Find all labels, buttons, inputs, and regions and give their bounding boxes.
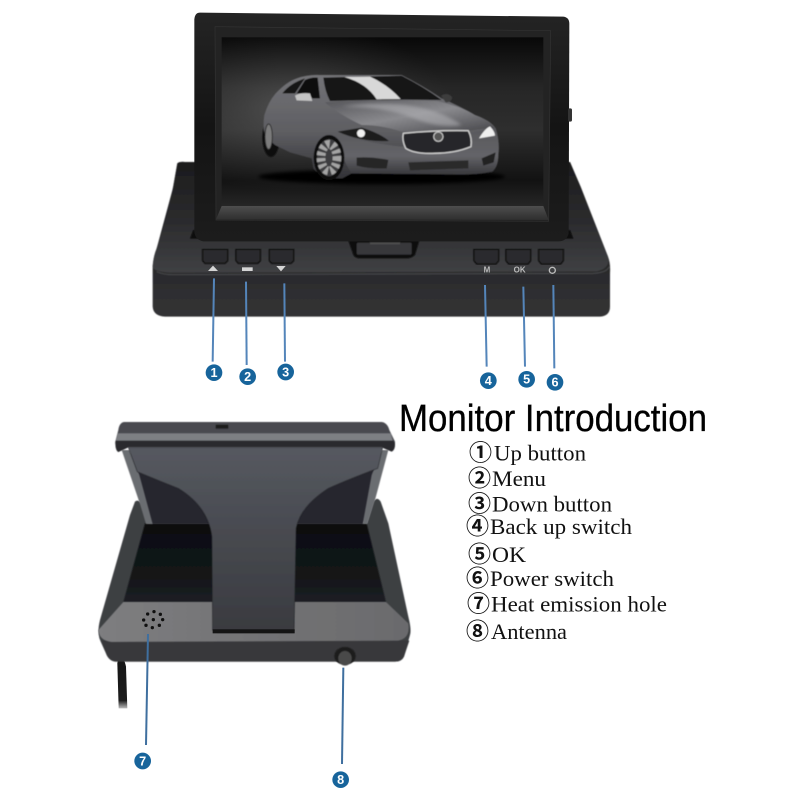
badge 4: 4 (485, 374, 492, 388)
button glyphs (208, 266, 555, 275)
legend item 1: Up button (494, 440, 586, 466)
lower left vent (357, 157, 388, 168)
badge 8 (332, 771, 349, 788)
rim spokes (321, 144, 337, 171)
lower right vent (482, 152, 496, 166)
badge 6: 6 (551, 376, 559, 390)
far side mirror (441, 94, 452, 102)
line 1 (213, 278, 214, 362)
badge 3: 3 (282, 365, 289, 379)
near side mirror (295, 93, 312, 101)
monitor display housing (190, 13, 573, 241)
badge 1 (206, 364, 222, 381)
line 3 (281, 283, 288, 362)
callout lines 1 to 6 (213, 278, 554, 368)
left headlight glow (357, 129, 365, 137)
screen (222, 37, 543, 206)
legend item 8: ⑧ (466, 612, 489, 646)
button power (539, 249, 563, 264)
front wheel (314, 135, 344, 180)
grille (403, 131, 471, 153)
base side rim (98, 499, 411, 662)
glyph OK label: OK (514, 266, 526, 275)
right headlight (479, 126, 495, 138)
lower screen frame (216, 206, 549, 220)
monitor top bar (115, 422, 395, 452)
hood (325, 100, 495, 132)
screen glow (222, 37, 543, 206)
antenna connector (334, 647, 356, 666)
base body (98, 499, 411, 662)
badge 8: 8 (337, 773, 344, 787)
legend list (466, 434, 667, 646)
callout line 7 (146, 634, 148, 745)
button M (474, 249, 499, 264)
legend item 8: Antenna (491, 619, 567, 644)
badge 7 (134, 753, 151, 769)
badge 6 (547, 374, 563, 391)
legend item 3: ③ (468, 484, 491, 518)
stand slot (213, 629, 295, 633)
rear view of monitor (98, 422, 411, 788)
legend item 7: ⑦ (467, 584, 490, 618)
left headlight (338, 128, 389, 141)
rear side window (282, 78, 305, 93)
line 2 (243, 282, 250, 365)
windshield (323, 76, 442, 101)
badge 4 (480, 372, 497, 389)
legend item 3: Down button (492, 492, 612, 516)
side knob (568, 108, 572, 122)
front view of monitor (153, 13, 610, 391)
heat emission holes (142, 610, 164, 629)
monitor side strip left (122, 450, 153, 524)
lower centre intake (408, 160, 468, 170)
badge 5: 5 (523, 373, 530, 387)
inner frame (215, 27, 551, 221)
hood highlight (342, 104, 462, 126)
rear wheel (262, 118, 280, 157)
badge 5 (518, 371, 535, 388)
front fascia (337, 128, 499, 174)
title: Monitor Introduction (399, 398, 707, 440)
windshield reflection (344, 77, 401, 99)
storage tray (123, 523, 386, 602)
hinge shadow (190, 230, 573, 239)
hinge latch (348, 241, 419, 258)
car on screen (258, 75, 505, 184)
legend item 4: ④ (466, 507, 489, 541)
legend item 1: ① (469, 434, 492, 468)
glyph menu bar (242, 267, 253, 271)
button up (203, 249, 228, 263)
legend item 6: ⑥ (466, 559, 489, 593)
badge 3 (277, 364, 294, 380)
badge (434, 132, 443, 141)
glyph down arrow (276, 266, 286, 271)
legend item 2: ② (468, 459, 491, 493)
legend item 7: Heat emission hole (491, 592, 667, 616)
glyph up arrow (208, 266, 218, 271)
button down (269, 249, 294, 263)
line 4 (485, 285, 487, 367)
rear rim (265, 124, 272, 149)
base front edge (102, 641, 409, 662)
glyph M label: M (484, 266, 491, 275)
callout badges 1 to 6 (206, 364, 563, 391)
base top face (98, 602, 409, 642)
car shadow (258, 169, 505, 184)
button menu (236, 249, 260, 263)
badge 1: 1 (210, 366, 218, 380)
legend item 5: OK (492, 542, 527, 567)
legend item 2: Menu (492, 466, 546, 491)
button OK (506, 249, 531, 264)
base unit (153, 162, 610, 317)
legend item 6: Power switch (490, 566, 614, 591)
monitor back panel (130, 453, 382, 524)
line 5 (523, 287, 525, 367)
car body (264, 75, 499, 178)
monitor side strip right (363, 450, 388, 524)
front side window (297, 78, 320, 98)
front rim (317, 139, 341, 176)
folding stand (128, 447, 383, 630)
badge 7: 7 (139, 754, 146, 768)
legend item 5: ⑤ (468, 535, 491, 569)
control buttons (203, 249, 563, 264)
power cable (117, 655, 127, 708)
line 6 (553, 285, 554, 368)
badge 2: 2 (244, 370, 251, 384)
callout line 8 (342, 668, 343, 764)
outer bezel (194, 13, 569, 241)
badge 2 (239, 368, 256, 385)
glyph power icon (549, 267, 555, 273)
legend item 4: Back up switch (490, 514, 632, 539)
